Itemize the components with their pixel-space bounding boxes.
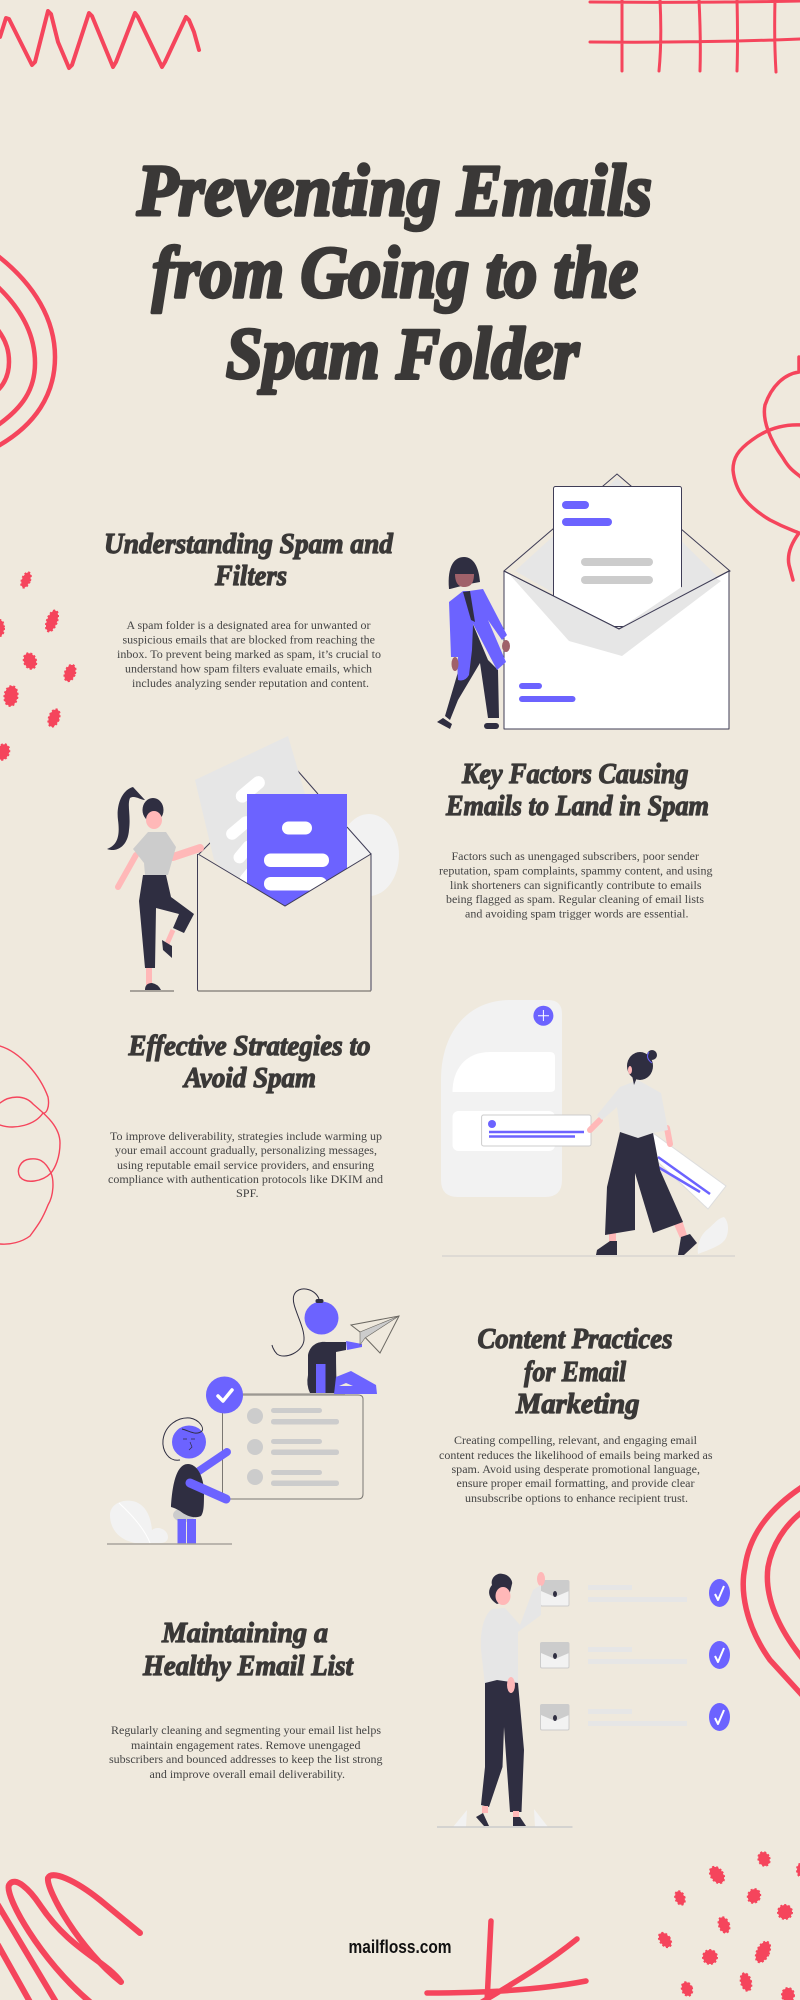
section 4 text [439,1433,713,1505]
section 2 heading: Emails to Land in Spam [445,790,709,822]
section 3 heading [128,1030,371,1094]
section 1 text: includes analyzing sender reputation and content. [132,676,369,690]
section 2 heading [445,758,709,822]
section 1 heading: Understanding Spam and [104,528,393,560]
section 2 text: link shorteners can significantly contribute to emails [450,878,702,892]
section 2 heading: Key Factors Causing [461,758,688,790]
section 4 text: content reduces the likelihood of emails being marked as [439,1448,713,1462]
section 1 text: inbox. To prevent being marked as spam, it’s crucial to [117,647,381,661]
title: Spam Folder [226,313,580,394]
section 4 heading: Content Practices [478,1323,672,1355]
decoration: left thin spiral [0,1046,60,1244]
section 3 text [108,1129,383,1200]
section 4 heading: Marketing [515,1388,640,1420]
section 4 text: unsubscribe options to enhance recipient trust. [465,1491,688,1505]
title: Preventing Emails [136,150,652,231]
section 2 text: and avoiding spam trigger words are essential. [465,906,689,920]
section 1 heading: Filters [214,560,287,592]
section 5 heading [142,1617,354,1682]
section 2 text: being flagged as spam. Regular cleaning of email lists [446,892,704,906]
section 5 text: and improve overall email deliverability. [150,1767,345,1781]
section 5 text [109,1723,383,1781]
section 3 text: SPF. [236,1186,259,1200]
footer: mailfloss.com: mailfloss.com [348,1937,452,1957]
section 4 heading [478,1323,672,1420]
section 4 text: Creating compelling, relevant, and engaging email [454,1433,698,1447]
section 1 text [117,618,381,690]
section 1 text: A spam folder is a designated area for unwanted or [126,618,371,632]
section 3 text: using reputable email service providers, and ensuring [117,1158,374,1172]
section 5 heading: Maintaining a [161,1617,328,1649]
decoration: left concentric arcs [0,256,55,446]
section 1 text: suspicious emails that are blocked from reaching the [122,632,375,646]
section 3 text: compliance with authentication protocols like DKIM and [108,1172,383,1186]
section 5 text: subscribers and bounced addresses to keep the list strong [109,1752,383,1766]
decoration: bottom star [427,1921,586,2000]
illustration: woman organising cards on phone panel [441,1000,735,1256]
section 4 text: ensure proper email formatting, and provide clear [456,1476,695,1490]
section 5 text: Regularly cleaning and segmenting your email list helps [111,1723,381,1737]
section 2 text: Factors such as unengaged subscribers, poor sender [452,849,699,863]
decoration: bottom-right brush dabs [656,1851,800,2000]
section 2 text [439,849,713,920]
title: from Going to the [152,232,638,313]
title [136,150,652,394]
section 1 text: understand how spam filters evaluate emails, which [125,662,372,676]
section 5 text: maintain engagement rates. Remove unengaged [131,1738,361,1752]
section 3 heading: Effective Strategies to [128,1030,371,1062]
decoration: top-right grid [590,0,800,72]
section 3 text: To improve deliverability, strategies include warming up [110,1129,382,1143]
illustration: woman beside open envelope [437,474,730,729]
section 3 text: your email account gradually, personalizing messages, [115,1143,377,1157]
section 2 text: reputation, spam complaints, spammy content, and using [439,864,713,878]
decoration: right scribble [733,357,800,580]
decoration: left brush dabs [0,571,78,762]
illustration: two people with checklist and paper plane [107,1289,399,1544]
section 5 heading: Healthy Email List [142,1650,354,1682]
section 3 heading: Avoid Spam [182,1062,316,1094]
decoration: right lower arcs [743,1487,800,1695]
section 1 heading [104,528,393,592]
section 4 heading: for Email [524,1356,627,1388]
section 4 text: spam. Avoid using desperate promotional language, [452,1462,700,1476]
decoration: top-left zigzag [0,11,199,68]
illustration: man reviewing checked email list [437,1572,730,1827]
decoration: bottom-left scribble [0,1875,140,2000]
illustration: woman with purple letter and envelope [107,736,399,991]
